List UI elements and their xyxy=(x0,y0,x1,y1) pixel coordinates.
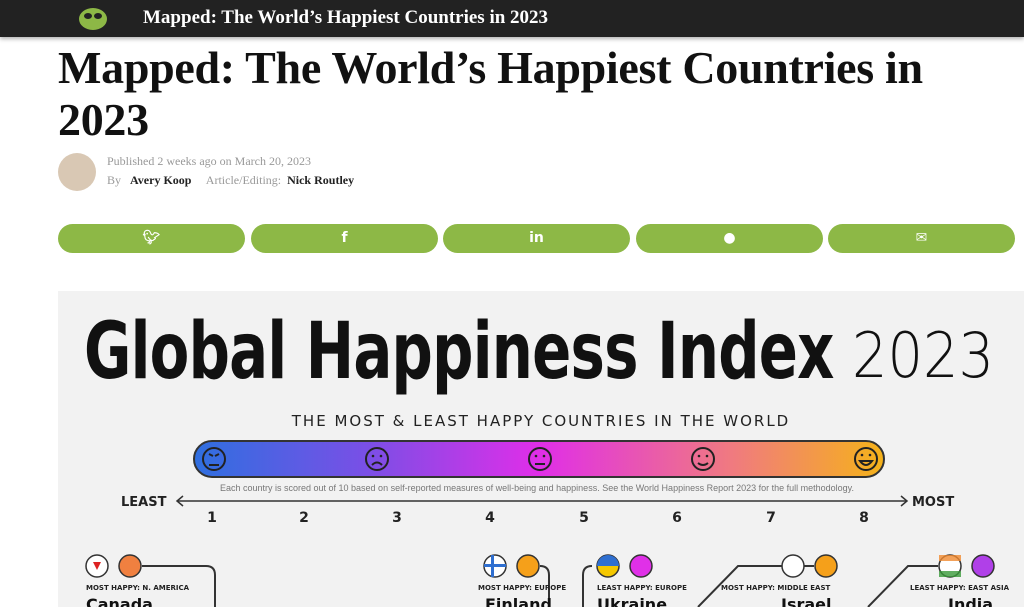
faces xyxy=(202,447,878,471)
share buttons: f xyxy=(341,230,348,246)
article headline: Mapped: The World’s Happiest Countries in xyxy=(58,42,923,93)
top bar title: Mapped: The World’s Happiest Countries in 2023 xyxy=(143,7,548,28)
gradient scale bar xyxy=(193,440,885,478)
top bar xyxy=(0,0,1024,37)
byline xyxy=(58,153,354,191)
axis: 8 xyxy=(859,510,869,526)
axis: MOST xyxy=(912,495,954,510)
avatar xyxy=(58,153,96,191)
article headline: 2023 xyxy=(58,94,149,145)
byline: By Avery Koop Article/Editing: Nick Routley xyxy=(107,173,354,187)
axis: 1 xyxy=(207,510,217,526)
country cards: MOST HAPPY: EUROPE xyxy=(478,584,566,592)
share buttons: 🐦︎ xyxy=(143,230,160,246)
axis: 4 xyxy=(485,510,495,526)
infographic panel xyxy=(58,291,1024,607)
year: 2023 xyxy=(852,319,994,392)
axis xyxy=(121,495,954,526)
infographic title: Global Happiness Index xyxy=(84,307,834,397)
article headline xyxy=(58,42,923,145)
country cards xyxy=(85,554,1010,607)
country cards: MOST HAPPY: MIDDLE EAST xyxy=(721,584,831,592)
country cards: LEAST HAPPY: EAST ASIA xyxy=(910,584,1010,592)
subtitle: THE MOST & LEAST HAPPY COUNTRIES IN THE WORLD xyxy=(292,412,790,430)
caption: Each country is scored out of 10 based on self-reported measures of well-being and happiness. See the World Happiness Report 2023 for the full methodology. xyxy=(220,483,854,493)
axis: 5 xyxy=(579,510,589,526)
axis: 3 xyxy=(392,510,402,526)
axis: 6 xyxy=(672,510,682,526)
axis: 2 xyxy=(299,510,309,526)
share buttons xyxy=(58,224,1015,253)
axis: 7 xyxy=(766,510,776,526)
share buttons: ● xyxy=(723,230,736,246)
byline: Published 2 weeks ago on March 20, 2023 xyxy=(107,154,311,168)
logo icon xyxy=(79,8,107,30)
axis: LEAST xyxy=(121,495,167,510)
share buttons: ✉︎ xyxy=(916,230,927,246)
country cards: LEAST HAPPY: EUROPE xyxy=(597,584,687,592)
share buttons: in xyxy=(529,230,544,246)
country cards: MOST HAPPY: N. AMERICA xyxy=(86,584,190,592)
